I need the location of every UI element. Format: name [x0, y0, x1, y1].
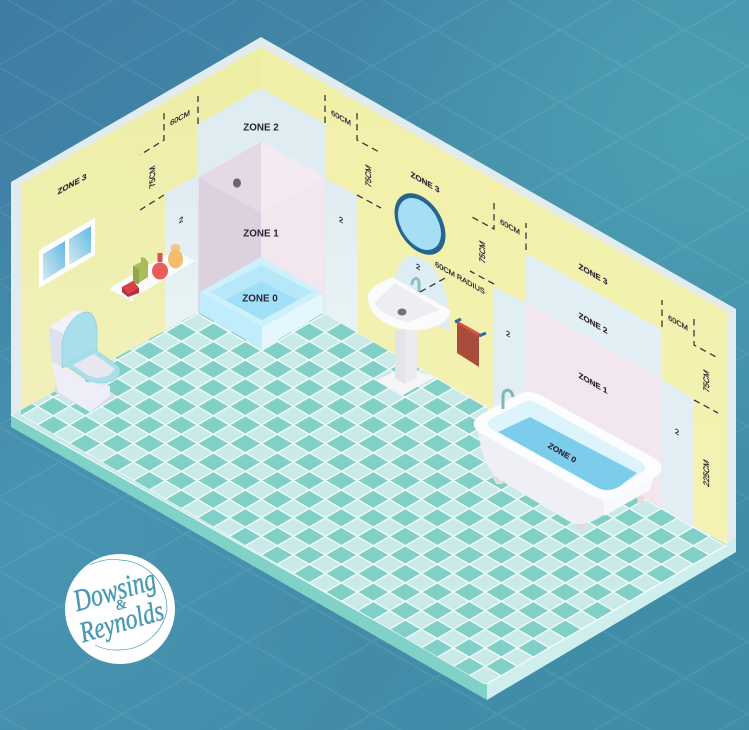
zone labels: 2: [506, 329, 511, 340]
bath feet: [492, 476, 645, 530]
toilet: [49, 310, 120, 412]
icon: orange vase: [168, 244, 183, 268]
zone labels: 2: [339, 215, 344, 226]
bath pillar zone 2: [662, 379, 694, 527]
bath zone 2: [526, 253, 662, 379]
zone labels: 225CM: [701, 457, 711, 489]
zone labels: 75CM: [147, 164, 157, 190]
towel rail: [455, 319, 486, 367]
zone labels: 60CM: [500, 217, 520, 237]
zone labels: 60CM: [668, 313, 688, 333]
floor tiles: [11, 277, 727, 684]
zone labels: 60CM: [170, 108, 190, 128]
zone 2 band left: [198, 88, 261, 177]
zone 2 pillar left: [165, 175, 198, 330]
icon: shower head: [233, 178, 241, 188]
window: [39, 218, 95, 288]
zone labels: ZONE 1: [579, 370, 608, 396]
logo wordmark: [66, 561, 168, 650]
zone labels: 60CM RADIUS: [435, 260, 485, 296]
shower outline: [198, 141, 325, 313]
toilet seat: [65, 350, 120, 383]
toilet bowl: [73, 354, 115, 378]
zone labels: 2: [179, 215, 183, 225]
shelf with toiletries: [111, 244, 195, 302]
zone labels: 75CM: [701, 368, 711, 394]
zone labels: 2: [675, 427, 680, 438]
toilet tank: [49, 327, 63, 367]
panel: shower: [198, 141, 325, 349]
mirror: [394, 184, 446, 264]
sink basin: [368, 277, 450, 330]
zone 2 band right: [261, 88, 325, 178]
shower tray: [200, 257, 323, 349]
logo: [65, 554, 175, 664]
toilet base: [55, 385, 115, 412]
zone labels: ZONE 3: [579, 261, 608, 287]
zone 2 pillar beside sink: [494, 287, 526, 430]
sink base: [377, 367, 435, 395]
logo wordmark: Reynolds: [75, 595, 167, 650]
zone labels: ZONE 0: [242, 294, 278, 304]
zone labels: ZONE 3: [58, 171, 87, 197]
bath water: [498, 417, 637, 490]
zone labels: 75CM: [363, 163, 373, 189]
sink tap: [412, 278, 419, 292]
icon: green bottle: [133, 257, 148, 284]
sink bowl: [375, 283, 440, 322]
zone labels: 60CM: [331, 108, 351, 128]
zone labels: 2: [416, 262, 421, 273]
bath body: [478, 410, 656, 524]
panel: right wall: [261, 47, 727, 545]
wall frame: [11, 37, 736, 545]
zone 2 pillar right: [325, 178, 358, 333]
shelf: [111, 250, 195, 302]
zone labels: [58, 108, 711, 489]
toilet body: [52, 362, 110, 412]
sink zone 2 arch: [393, 256, 449, 330]
logo wordmark: &: [114, 597, 129, 614]
zone labels: ZONE 0: [546, 441, 578, 465]
shower right panel: [261, 141, 325, 315]
zone labels: ZONE 1: [243, 228, 279, 240]
logo wordmark: Dowsing: [69, 561, 160, 618]
zone labels: ZONE 2: [579, 310, 608, 336]
zone labels: ZONE 2: [243, 122, 279, 134]
logo ring: [90, 559, 167, 650]
zone labels: 75CM: [477, 239, 487, 265]
zone labels: ZONE 3: [411, 169, 440, 195]
icon: red soap: [122, 281, 139, 297]
shower ceiling: [198, 141, 325, 213]
bath interior: [488, 401, 645, 490]
sink pedestal: [395, 330, 417, 384]
shower left panel: [198, 141, 261, 315]
dimension lines: [140, 95, 718, 413]
bath: [474, 390, 662, 530]
sink: [368, 277, 450, 395]
bath zone 1: [526, 303, 662, 508]
floor slab: [11, 415, 736, 700]
icon: red vase: [152, 253, 168, 280]
bath rim: [474, 392, 662, 500]
sink drain: [398, 308, 406, 316]
toilet lid: [62, 312, 97, 368]
panel: left wall: [21, 47, 261, 410]
bath tap: [503, 390, 513, 409]
